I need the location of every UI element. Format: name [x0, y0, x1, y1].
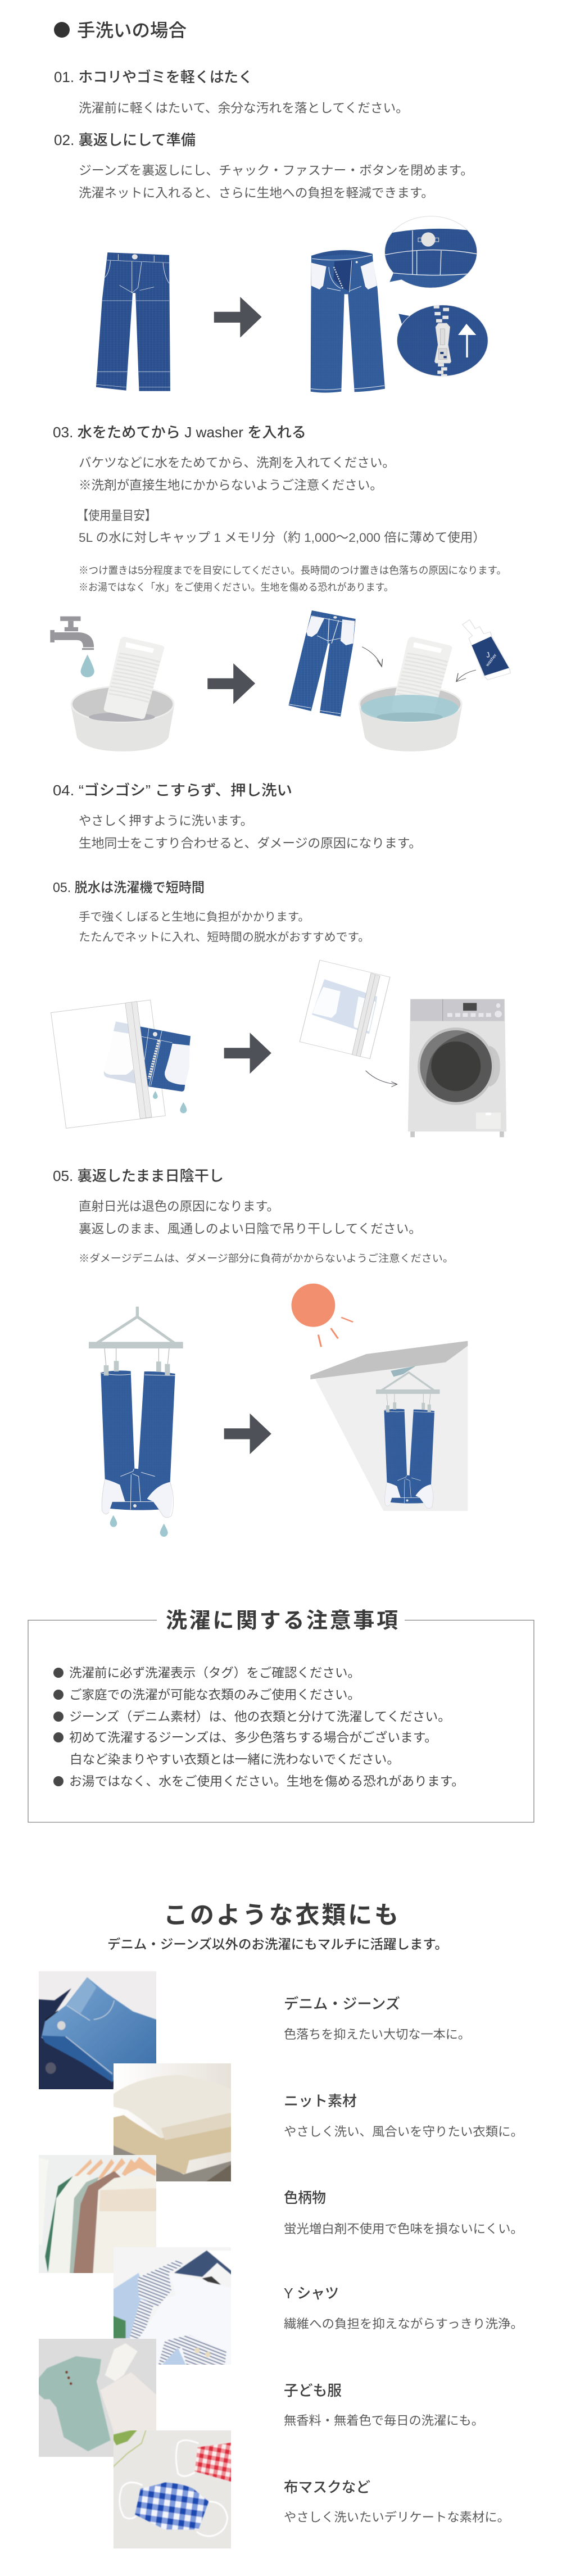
text: item colored [284, 2189, 523, 2236]
panel: other garments [36, 1902, 523, 2548]
heading: step 02: 02. 裏返しにして準備 [54, 132, 196, 148]
icon: net zipper [125, 1002, 152, 1119]
list: cautions [53, 1666, 464, 1789]
icon: inside-out jeans [311, 250, 385, 393]
icon: bullet 1 [53, 1668, 64, 1678]
text: caution 4: 初めて洗濯するジーンズは、多少色落ちする場合がございます。 [69, 1730, 437, 1745]
photo: colored garments [39, 2155, 156, 2273]
text: step 03 body: バケツなどに水をためてから、洗剤を入れてください。 [79, 456, 395, 470]
text: step 04 body [79, 814, 422, 850]
photo: dress shirts [114, 2247, 231, 2365]
arrow: inside-out [214, 297, 262, 338]
text: shade dry body: 直射日光は退色の原因になります。 [79, 1199, 279, 1214]
text: item colored: 色柄物 [284, 2189, 326, 2206]
icon: roof [310, 1341, 468, 1379]
icon: folded jeans in net [104, 1021, 191, 1092]
text: item colored: 蛍光増白剤不使用で色味を損ないにくい。 [284, 2222, 523, 2236]
icon: pole [391, 1366, 416, 1377]
text: step 03 notes [79, 565, 506, 593]
illustration: jeans on hanger [89, 1307, 183, 1537]
icon: drip right [160, 1524, 168, 1537]
panel: step 03 [50, 424, 510, 751]
photo: children's clothes [39, 2339, 156, 2457]
text: spin dry body: たたんでネットに入れ、短時間の脱水がおすすめです。 [79, 931, 370, 944]
text: step 02 body [79, 164, 473, 200]
photo: jeans [39, 1971, 156, 2089]
icon: tilted jeans [288, 610, 356, 717]
text: usage guide: 【使用量目安】 [77, 509, 156, 523]
arrow: detergent into tub [456, 670, 476, 682]
text: caution 4: 白など染まりやすい衣類とは一緒に洗わないでください。 [70, 1753, 400, 1767]
icon: bullet 2 [53, 1690, 64, 1700]
title: 手洗いの場合 [77, 20, 187, 40]
panel: step 01 [54, 69, 409, 115]
illustration: tub and washboard [50, 617, 175, 751]
text: item shirt [284, 2285, 523, 2331]
text: shade dry note: ※ダメージデニムは、ダメージ部分に負荷がかからないようご注意ください。 [79, 1253, 454, 1264]
text: bottle label J: J [486, 650, 491, 659]
icon: heading bullet [54, 22, 70, 38]
text: shade dry body: 裏返しのまま、風通しのよい日陰で吊り干ししてください。 [79, 1222, 422, 1236]
panel: cautions [28, 1609, 534, 1822]
icon: hanger hook [136, 1307, 139, 1317]
heading: step 03: 03. 水をためてから J washer を入れる [53, 424, 306, 441]
text: caution 3: ジーンズ（デニム素材）は、他の衣類と分けて洗濯してください。 [69, 1710, 451, 1724]
icon: laundry net right [300, 960, 390, 1059]
text: step 03 notes: ※つけ置きは5分程度までを目安にしてください。長時間のつけ置きは色落ちの原因になります。 [79, 565, 506, 576]
icon: washing machine [408, 999, 506, 1137]
icon: filled tub with washboard [359, 637, 463, 751]
text: item knit [284, 2093, 523, 2139]
icon: bullet 4 [53, 1732, 64, 1742]
arrow: net to washer [366, 1071, 397, 1087]
icon: bullet 5 [53, 1776, 64, 1786]
icon: jeans front [96, 252, 170, 391]
arrow: add water [207, 663, 255, 704]
icon: zipper detail bubble [397, 305, 488, 378]
icon: bullet 3 [53, 1712, 64, 1722]
title: other garments: このような衣類にも [164, 1902, 398, 1929]
panel: hand wash heading [54, 20, 187, 40]
icon: jeans inside out with detail bubbles [311, 216, 488, 393]
text: item denim: デニム・ジーンズ [284, 1995, 400, 2012]
illustration: jeans going into tub with J washer [288, 610, 510, 751]
heading: step 04: 04. “ゴシゴシ” こすらず、押し洗い [53, 782, 292, 799]
text: caution 4 [69, 1730, 437, 1767]
heading: shade dry: 05. 裏返したまま日陰干し [53, 1167, 224, 1184]
icon: sun [292, 1284, 353, 1347]
panel: spin dry step [51, 880, 506, 1137]
icon: water drop [81, 655, 94, 677]
photo: knitwear [114, 2063, 231, 2181]
text: caution 1: 洗濯前に必ず洗濯表示（タグ）をご確認ください。 [69, 1666, 360, 1680]
text: step 04 body: やさしく押すように洗います。 [79, 814, 253, 828]
text: usage guide [77, 509, 486, 545]
icon: J washer bottle [463, 620, 510, 680]
icon: hanging jeans [89, 1317, 183, 1518]
text: item knit: ニット素材 [284, 2093, 357, 2109]
text: subtitle: デニム・ジーンズ以外のお洗濯にもマルチに活躍します。 [107, 1936, 448, 1952]
icon: laundry net [51, 1000, 165, 1128]
illustration: shade and sun [292, 1284, 468, 1511]
icon: small hanging jeans [376, 1373, 440, 1509]
text: item masks: やさしく洗いたいデリケートな素材に。 [284, 2510, 510, 2524]
illustration: jeans in laundry net [51, 1000, 191, 1128]
panel: shade dry step [53, 1167, 468, 1537]
text: item shirt: Y シャツ [284, 2285, 339, 2302]
text: usage guide: 5L の水に対しキャップ 1 メモリ分（約 1,000～2,000 倍に薄めて使用） [79, 531, 486, 545]
text: step 03 notes: ※お湯ではなく「水」をご使用ください。生地を傷める恐れがあります。 [79, 582, 393, 593]
text: step 03 body: ※洗剤が直接生地にかからないようご注意ください。 [79, 478, 383, 492]
text: item kids [284, 2382, 484, 2428]
icon: empty tub [71, 686, 175, 751]
text: shade dry body [79, 1199, 422, 1236]
text: item kids: 無香料・無着色で毎日の洗濯にも。 [284, 2414, 484, 2428]
text: spin dry body: 手で強くしぼると生地に負担がかかります。 [79, 911, 310, 923]
text: item masks [284, 2479, 510, 2524]
panel border [28, 1620, 534, 1822]
heading: cautions: 洗濯に関する注意事項 [166, 1609, 398, 1633]
text: item knit: やさしく洗い、風合いを守りたい衣類に。 [284, 2125, 523, 2139]
heading: step 01: 01. ホコリやゴミを軽くはたく [54, 69, 253, 85]
arrow: jeans into tub [362, 647, 383, 667]
heading: spin dry: 05. 脱水は洗濯機で短時間 [53, 880, 205, 895]
text: bottle label washer: washer [484, 653, 498, 668]
icon: water drop large [180, 1102, 187, 1113]
text: item masks: 布マスクなど [284, 2479, 370, 2496]
text: item kids: 子ども服 [284, 2382, 342, 2399]
text: item shirt: 繊維への負担を抑えながらすっきり洗浄。 [284, 2317, 523, 2331]
text: spin dry body [79, 911, 370, 944]
text: caution 2: ご家庭での洗濯が可能な衣類のみご使用ください。 [69, 1688, 360, 1702]
icon: button detail bubble [384, 216, 478, 288]
text: item denim [284, 1995, 470, 2041]
text: step 02 body: ジーンズを裏返しにし、チャック・ファスナー・ボタンを閉めます。 [79, 164, 473, 178]
panel: step 02 [54, 132, 488, 393]
icon: shade area [315, 1346, 468, 1511]
text: step 03 body [79, 456, 395, 492]
icon: faucet [50, 617, 94, 650]
photo: cloth masks [114, 2430, 231, 2548]
text: caution 5: お湯ではなく、水をご使用ください。生地を傷める恐れがあります。 [69, 1774, 464, 1789]
panel: step 04 [53, 782, 422, 850]
icon: washboard [104, 637, 164, 719]
arrow: into washer [224, 1033, 271, 1074]
text: step 04 body: 生地同士をこすり合わせると、ダメージの原因になります。 [79, 836, 422, 850]
icon: drip left [110, 1515, 117, 1527]
text: step 02 body: 洗濯ネットに入れると、さらに生地への負担を軽減できます。 [79, 186, 434, 200]
arrow: to shade [224, 1414, 271, 1454]
text: item denim: 色落ちを抑えたい大切な一本に。 [284, 2027, 470, 2041]
illustration: net going into washing machine [300, 960, 506, 1137]
icon: water drop small [153, 1091, 158, 1099]
text: step 01 body: 洗濯前に軽くはたいて、余分な汚れを落としてください。 [79, 101, 409, 115]
